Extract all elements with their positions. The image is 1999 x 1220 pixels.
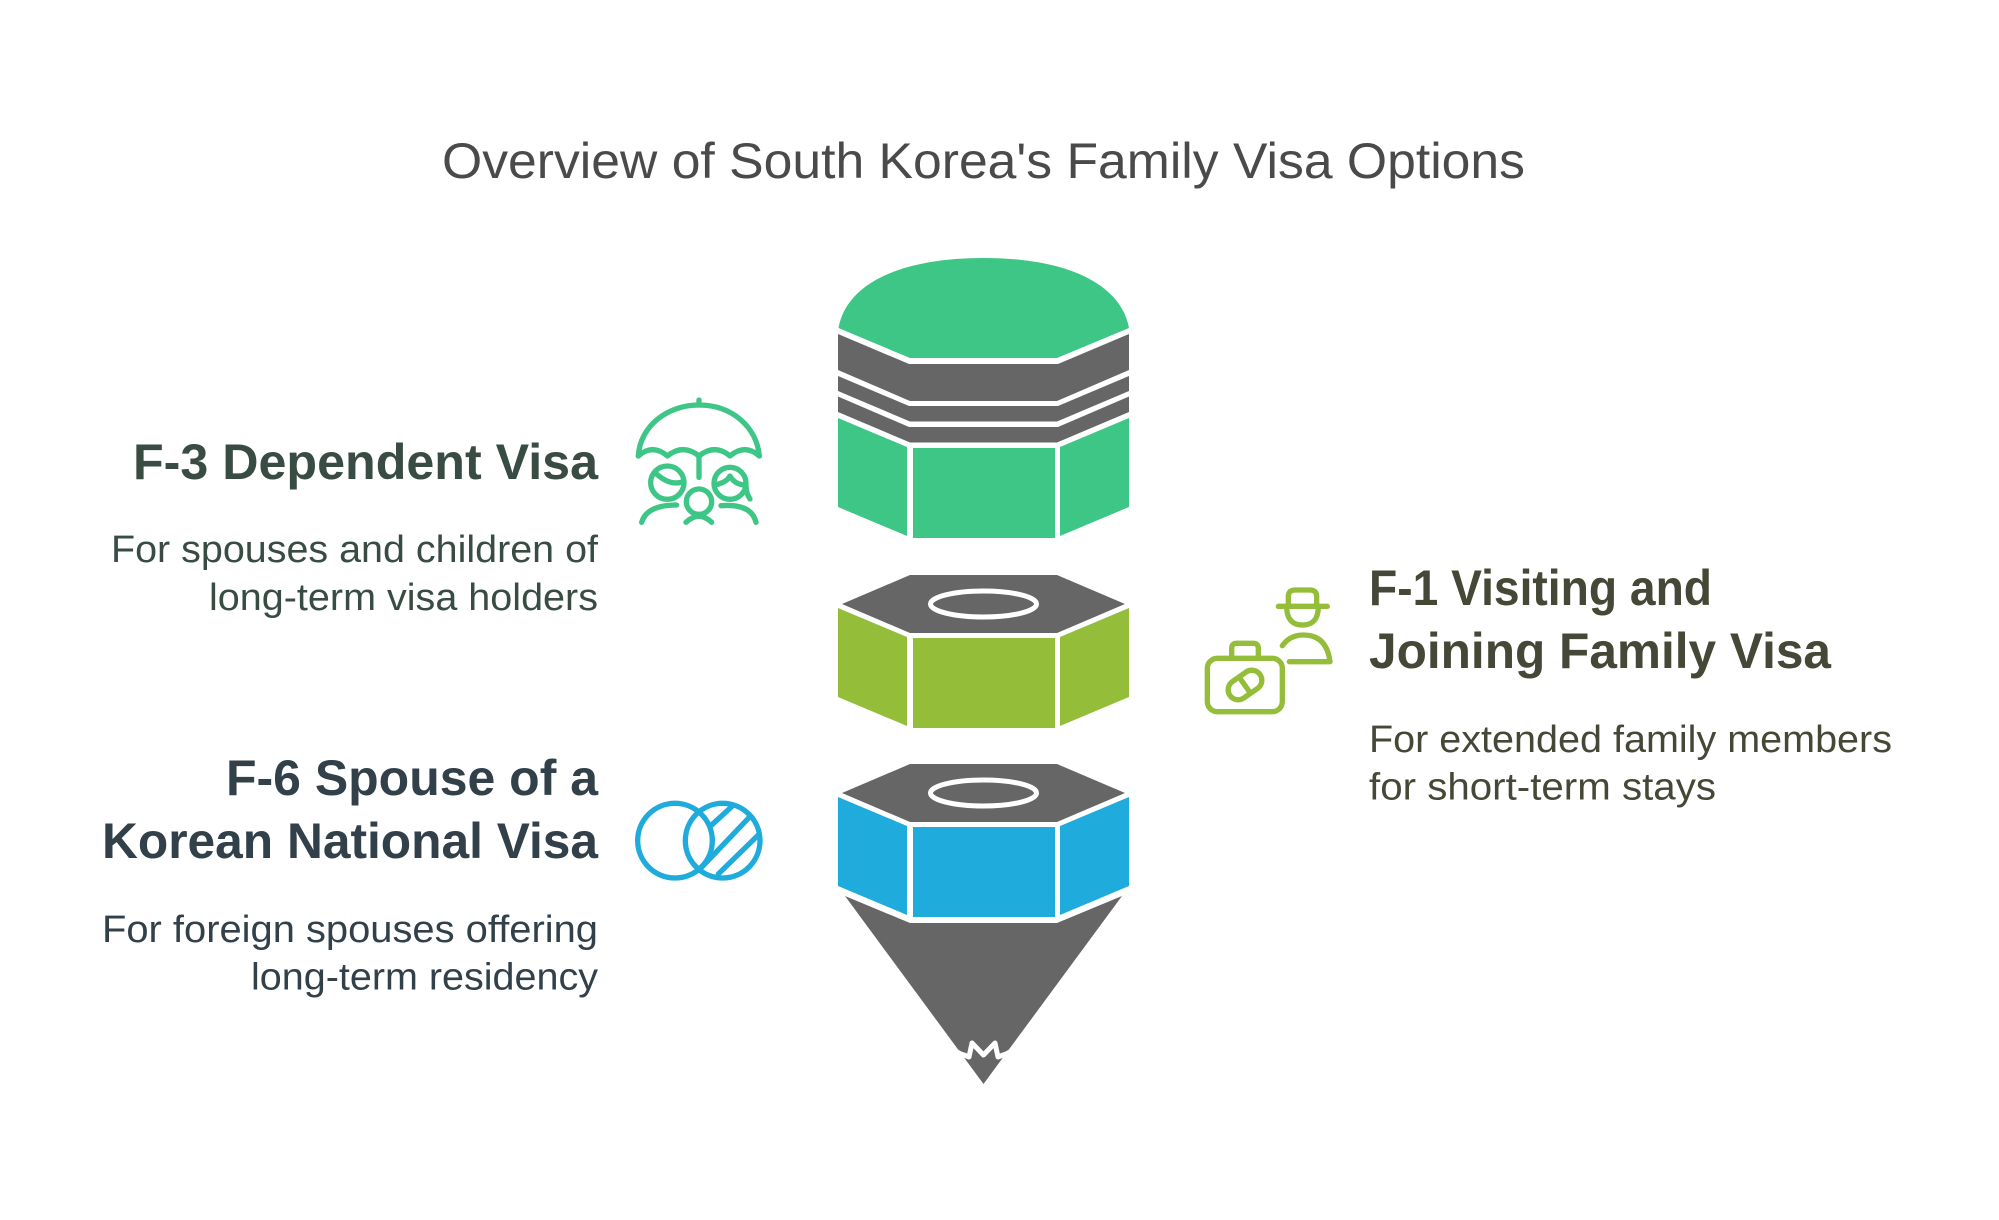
F-6 heading: Korean National Visa — [102, 813, 599, 869]
F-1 heading — [1369, 560, 1832, 679]
F-1 heading: Joining Family Visa — [1369, 623, 1832, 679]
F-6 description: For foreign spouses offering — [102, 909, 598, 951]
F-3 description: For spouses and children of — [111, 529, 598, 571]
grey bands — [838, 334, 1129, 442]
olive segment — [838, 575, 1129, 728]
F-1 description: For extended family members — [1369, 719, 1892, 761]
top green segment — [838, 258, 1129, 538]
icon: person with suitcase — [1207, 590, 1330, 712]
F-1 Visiting and Joining Family Visa text block — [1369, 560, 1892, 808]
F-6 description — [102, 909, 598, 998]
F-3 description: long-term visa holders — [209, 577, 598, 619]
icon: overlapping circles — [638, 803, 760, 878]
F-1 heading: F-1 Visiting and — [1369, 560, 1712, 616]
blue segment — [838, 764, 1129, 917]
icon: umbrella over family — [638, 400, 759, 522]
title: Overview of South Korea's Family Visa Options — [442, 133, 1525, 189]
F-6 heading: F-6 Spouse of a — [226, 750, 599, 806]
F-3 description — [111, 529, 598, 619]
stacked hexagonal column diagram — [838, 258, 1129, 1084]
F-3 Dependent Visa text block — [111, 434, 599, 619]
F-6 Spouse of a Korean National Visa text block — [102, 750, 599, 998]
F-6 description: long-term residency — [251, 956, 598, 998]
F-1 description: for short-term stays — [1369, 766, 1716, 808]
grey cone tip — [845, 896, 1122, 1084]
F-6 heading — [102, 750, 599, 869]
F-1 description — [1369, 719, 1892, 808]
F-3 heading: F-3 Dependent Visa — [133, 434, 599, 490]
